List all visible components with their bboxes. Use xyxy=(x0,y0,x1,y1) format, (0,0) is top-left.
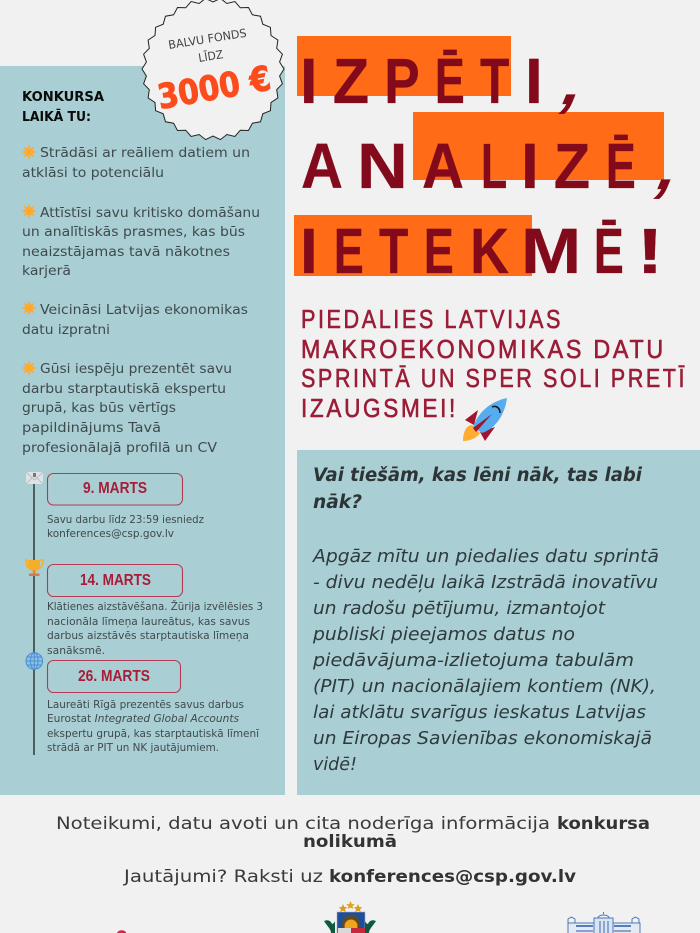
timeline item: 9 March: konferences@csp.gov.lv xyxy=(47,527,175,540)
title: Izpēti, analizē, ietekmē: Ē xyxy=(594,215,624,287)
timeline item: 26 March: 26. MARTS xyxy=(78,668,150,685)
subheading: join the data sprint: MAKROEKONOMIKAS DATU xyxy=(301,336,666,364)
text block: question heading: Vai tiešām, kas lēni nāk, tas labi xyxy=(313,465,643,486)
footer text: rules and contact: nolikumā xyxy=(303,832,397,852)
timeline item: 26 March: ekspertu grupā, kas starptautiskā līmenī xyxy=(47,727,260,740)
logo: coat of arms of Latvia xyxy=(324,901,376,933)
footer text: rules and contact xyxy=(56,814,650,887)
logo: university building xyxy=(568,912,640,933)
text block: sprint description: (PIT) un nacionālajiem kontiem (NK), xyxy=(313,677,656,697)
text block: sprint description: lai atklātu svarīgus ieskatus Latvijas xyxy=(313,703,646,723)
badge: prize fund up to 3000 euro: LĪDZ xyxy=(197,47,224,65)
title: Izpēti, analizē, ietekmē: E xyxy=(334,215,364,287)
timeline item: 14 March: Klātienes aizstāvēšana. Žūrija izvēlēsies 3 xyxy=(47,600,263,613)
footer text: rules and contact: Jautājumi? Raksti uz xyxy=(123,867,323,887)
badge: prize fund up to 3000 euro: 3000 € xyxy=(155,59,274,118)
title: Izpēti, analizē, ietekmē: M xyxy=(521,215,581,287)
footer text: rules and contact: konferences@csp.gov.lv xyxy=(329,867,576,887)
title: Izpēti, analizē, ietekmē: I xyxy=(525,45,543,117)
title: Izpēti, analizē, ietekmē: T xyxy=(379,215,408,287)
icon: trophy xyxy=(26,560,43,576)
heading: competition period: KONKURSA xyxy=(22,90,104,105)
title: Izpēti, analizē, ietekmē: E xyxy=(424,215,454,287)
title: Izpēti, analizē, ietekmē: K xyxy=(470,215,509,287)
heading: competition period xyxy=(22,90,104,125)
list item: real data: atklāsi to potenciālu xyxy=(22,165,164,181)
timeline item: 9 March: Savu darbu līdz 23:59 iesniedz xyxy=(47,513,204,526)
timeline item: 26 March: Laureāti Rīgā prezentēs savus darbus xyxy=(47,698,244,711)
list item: critical thinking: neaizstājamas tavā nākotnes xyxy=(22,244,230,260)
title: Izpēti, analizē, ietekmē: N xyxy=(357,130,408,202)
list item: economic data understanding: Veicināsi Latvijas ekonomikas xyxy=(40,302,248,318)
badge: prize fund up to 3000 euro xyxy=(142,0,284,140)
icon: star xyxy=(22,204,36,218)
timeline item: 9 March: 9. MARTS xyxy=(83,480,147,497)
icon: star xyxy=(22,300,36,316)
text block: sprint description: vidē! xyxy=(313,755,357,775)
list item: international presentation: papildinājums Tavā xyxy=(22,420,161,436)
text block: sprint description xyxy=(312,547,659,775)
footer text: rules and contact: konkursa xyxy=(557,814,650,834)
title: Izpēti, analizē, ietekmē: I xyxy=(300,45,318,117)
subheading: join the data sprint: IZAUGSMEI! xyxy=(301,395,458,423)
title: Izpēti, analizē, ietekmē: I xyxy=(300,215,318,287)
list item: international presentation: profesionālajā profilā un CV xyxy=(22,440,218,456)
timeline item: 14 March: nacionāla līmeņa laureātus, kas savus xyxy=(47,615,250,628)
title: Izpēti, analizē, ietekmē: , xyxy=(647,132,694,203)
icon: globe xyxy=(26,653,43,669)
timeline item: 9 March xyxy=(47,474,204,540)
timeline item: 14 March: 14. MARTS xyxy=(80,572,151,589)
title: Izpēti, analizē, ietekmē: ! xyxy=(637,215,663,287)
text block: sprint description: - divu nedēļu laikā Izstrādā inovatīvu xyxy=(313,573,658,593)
icon: star xyxy=(22,360,36,376)
timeline item: 26 March: strādā ar PIT un NK jautājumiem. xyxy=(47,741,219,754)
title: Izpēti, analizē, ietekmē: A xyxy=(301,130,343,202)
list item: international presentation: darbu starptautiskā ekspertu xyxy=(22,381,226,397)
list item: economic data understanding: datu izpratni xyxy=(22,322,110,338)
title: Izpēti, analizē, ietekmē: L xyxy=(481,130,507,202)
title: Izpēti, analizē, ietekmē: , xyxy=(552,47,599,118)
panel: right question and description xyxy=(297,450,700,795)
list item: international presentation: Gūsi iespēju prezentēt savu xyxy=(40,361,232,377)
badge: prize fund up to 3000 euro: BALVU FONDS xyxy=(167,26,247,52)
title: Izpēti, analizē, ietekmē: Z xyxy=(554,130,590,202)
footer text: rules and contact: Noteikumi, datu avoti un cita noderīga informācija xyxy=(56,814,550,834)
text block: question heading: nāk? xyxy=(313,492,362,513)
list item: critical thinking xyxy=(22,204,260,279)
title: Izpēti, analizē, ietekmē: T xyxy=(480,45,509,117)
timeline item: 26 March xyxy=(47,660,260,754)
subheading: join the data sprint xyxy=(301,306,687,423)
title: Izpēti, analizē, ietekmē: I xyxy=(521,130,539,202)
panel: left competition benefits and timeline xyxy=(0,66,285,795)
timeline item: 14 March: sanāksmē. xyxy=(47,644,105,657)
text block: sprint description: publiski pieejamos datus no xyxy=(312,625,575,645)
icon: rocket xyxy=(463,398,507,441)
logo: red partial mark xyxy=(117,930,126,933)
title: Izpēti, analizē, ietekmē xyxy=(294,36,694,287)
list item: critical thinking: karjerā xyxy=(22,263,71,279)
text block: question heading xyxy=(313,465,643,513)
heading: competition period: LAIKĀ TU: xyxy=(22,110,91,125)
title: Izpēti, analizē, ietekmē: Ē xyxy=(435,45,465,117)
list item: economic data understanding xyxy=(22,300,248,338)
subheading: join the data sprint: PIEDALIES LATVIJAS xyxy=(301,306,563,334)
timeline item: 14 March: darbus aizstāvēs starptautiska līmeņa xyxy=(47,629,249,642)
list item: real data: Strādāsi ar reāliem datiem un xyxy=(40,145,250,161)
title: Izpēti, analizē, ietekmē: P xyxy=(384,45,420,117)
timeline item: 26 March: Eurostat Integrated Global Accounts xyxy=(47,712,239,725)
text block: sprint description: piedāvājuma-izlietojuma tabulām xyxy=(312,651,634,671)
text block: sprint description: un radošu pētījumu, izmantojot xyxy=(313,599,606,619)
icon: envelope xyxy=(26,472,43,484)
list item: critical thinking: un analītiskās prasmes, kas būs xyxy=(22,224,245,240)
list item: critical thinking: Attīstīsi savu kritisko domāšanu xyxy=(40,205,260,221)
timeline item: 14 March xyxy=(47,564,263,657)
timeline line xyxy=(33,478,35,755)
list item: international presentation xyxy=(22,360,232,456)
title: Izpēti, analizē, ietekmē: Z xyxy=(333,45,369,117)
title: Izpēti, analizē, ietekmē: Ē xyxy=(606,130,636,202)
text block: sprint description: un Eiropas Savienības ekonomiskajā xyxy=(313,729,652,749)
text block: sprint description: Apgāz mītu un piedalies datu sprintā xyxy=(312,547,659,567)
title: Izpēti, analizē, ietekmē: A xyxy=(422,130,464,202)
icon: star xyxy=(22,144,36,160)
list item: international presentation: grupā, kas būs vērtīgs xyxy=(22,400,176,416)
list item: real data xyxy=(22,144,250,181)
